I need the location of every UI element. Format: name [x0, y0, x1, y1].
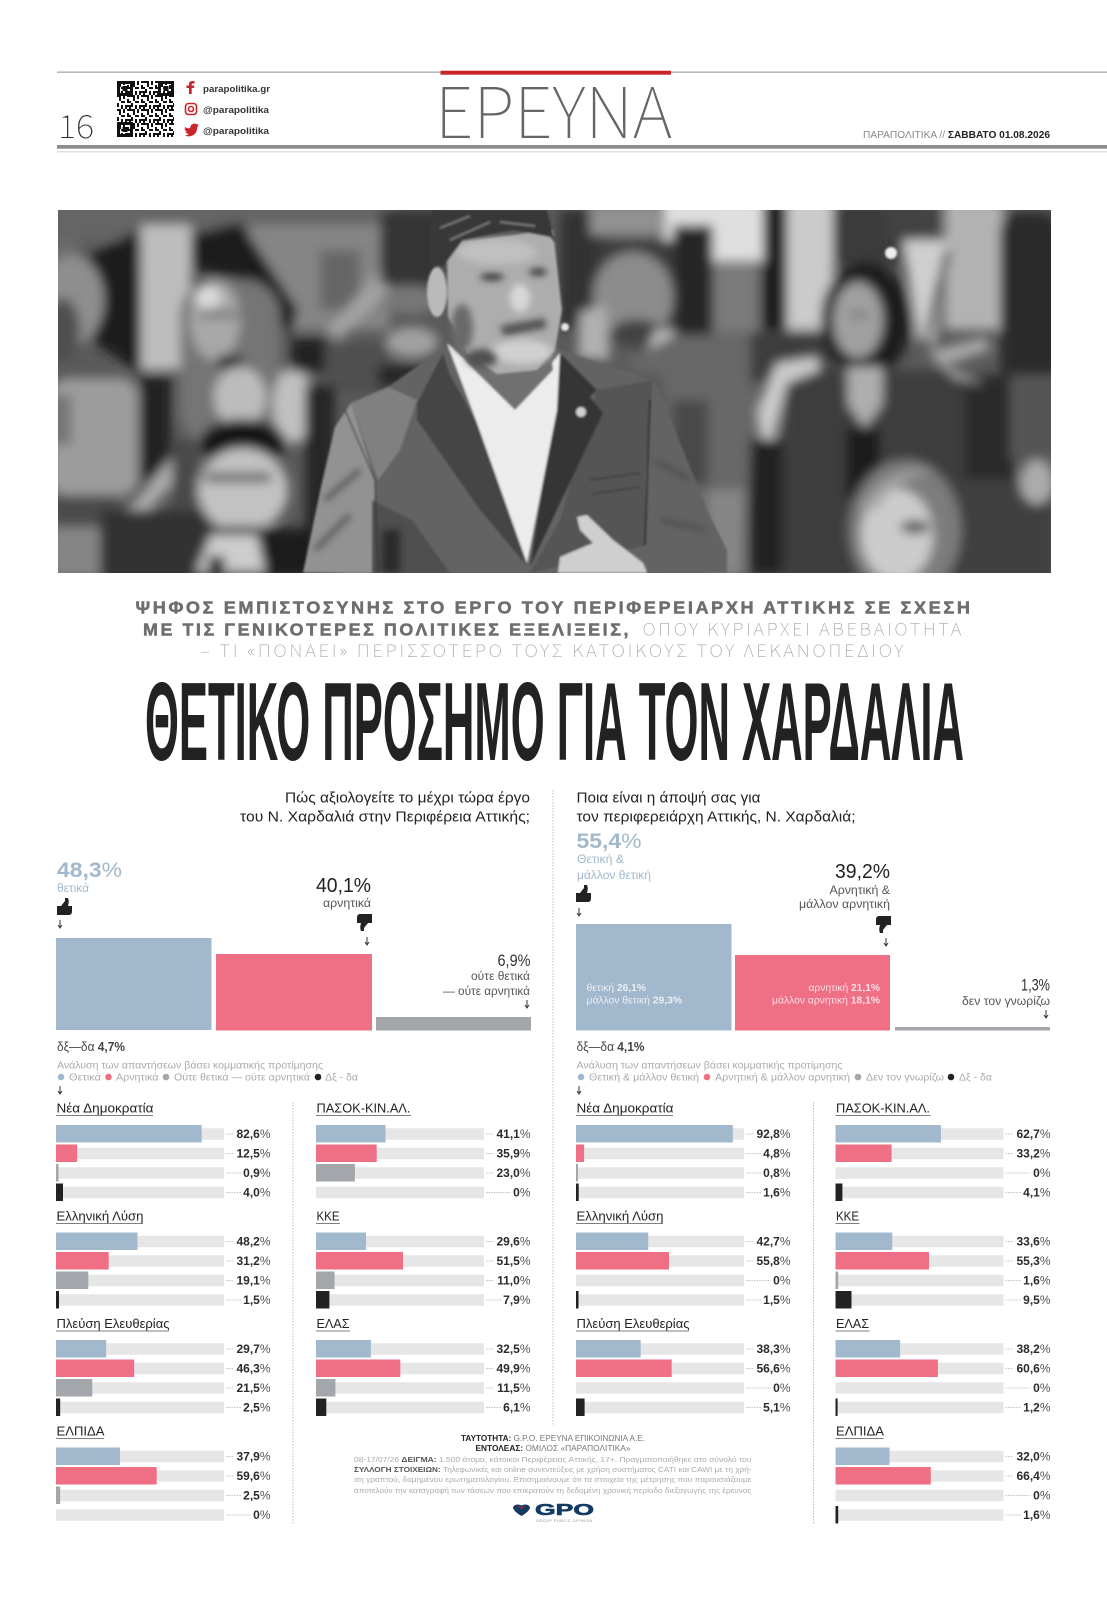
callout: positive: θετικά	[57, 883, 89, 895]
party bars: Πλεύση Ελευθερίας (right): 56,6%	[756, 1362, 791, 1376]
bar annotation: positive split	[586, 982, 682, 1006]
legend	[58, 1072, 358, 1094]
panel: left question summary	[56, 790, 531, 1094]
icon: twitter	[184, 124, 199, 136]
party bars: Πλεύση Ελευθερίας (right): Πλεύση Ελευθερίας	[576, 1317, 690, 1331]
callout: neither	[443, 951, 530, 1008]
woman with long hair	[180, 280, 280, 445]
party bars: Πλεύση Ελευθερίας (right): 0%	[773, 1381, 791, 1395]
sleeve creases	[315, 460, 705, 573]
icon: instagram	[186, 104, 196, 114]
party bars: Νέα Δημοκρατία (right): 4,8%	[763, 1146, 791, 1160]
party bars: ΠΑΣΟΚ-ΚΙΝ.ΑΛ. (left)	[316, 1102, 531, 1200]
callout: negative	[316, 875, 372, 945]
party bars: ΕΛΑΣ (right): 0%	[1033, 1381, 1051, 1395]
seated man	[258, 528, 310, 578]
party bars: Ελληνική Λύση (right): 1,5%	[763, 1293, 791, 1307]
party bars: ΚΚΕ (left)	[316, 1210, 531, 1308]
party bars: ΚΚΕ (right): 9,5%	[1023, 1293, 1051, 1307]
party bars: Ελληνική Λύση (right): 0%	[773, 1274, 791, 1288]
party bars: Πλεύση Ελευθερίας (left): 21,5%	[236, 1381, 271, 1395]
kicker: – ΤΙ «ΠΟΝΑΕΙ» ΠΕΡΙΣΣΟΤΕΡΟ ΤΟΥΣ ΚΑΤΟΙΚΟΥΣ ΤΟΥ ΛΕΚΑΝΟΠΕΔΙΟΥ	[200, 638, 906, 663]
party bars: ΕΛΠΙΔΑ (right)	[836, 1424, 1051, 1524]
social links: @parapolitika	[203, 126, 270, 137]
callout: positive: 48,3%	[57, 859, 122, 882]
party bars: ΠΑΣΟΚ-ΚΙΝ.ΑΛ. (right)	[836, 1102, 1051, 1201]
callout: negative	[799, 861, 891, 946]
party bars: ΕΛΑΣ (left): 6,1%	[503, 1400, 531, 1414]
logo: GPO: GPO	[535, 1502, 594, 1519]
section red bar	[440, 71, 671, 75]
header top rule	[57, 72, 1107, 73]
backdrop left	[50, 200, 395, 240]
party bars: Πλεύση Ελευθερίας (left)	[56, 1317, 271, 1416]
party bars: ΕΛΠΙΔΑ (left): ΕΛΠΙΔΑ	[56, 1424, 105, 1438]
social links	[184, 81, 270, 137]
party bars: ΕΛΑΣ (left): 32,5%	[496, 1342, 531, 1356]
party bars: ΠΑΣΟΚ-ΚΙΝ.ΑΛ. (right): 4,1%	[1023, 1186, 1051, 1200]
party bars: Ελληνική Λύση (left): 1,5%	[243, 1293, 271, 1307]
methodology note: ΣΥΛΛΟΓΗ ΣΤΟΙΧΕΙΩΝ: Τηλεφωνικές και online συνεντεύξεις με χρήση συστήματος CATI και CAWI με τη χρή-	[354, 1465, 752, 1474]
lapel right	[530, 353, 603, 567]
dk/na figure: δξ—δα 4,7%	[57, 1039, 125, 1054]
party bars: ΚΚΕ (right): ΚΚΕ	[836, 1210, 859, 1224]
callout: positive	[57, 859, 122, 928]
party bars: ΕΛΑΣ (left): 49,9%	[496, 1362, 531, 1376]
party bars: ΠΑΣΟΚ-ΚΙΝ.ΑΛ. (right): ΠΑΣΟΚ-ΚΙΝ.ΑΛ.	[836, 1102, 930, 1116]
sub-column divider left	[292, 1102, 294, 1524]
question: τον περιφερειάρχη Αττικής, Ν. Χαρδαλιά;	[576, 808, 856, 826]
party bars: Πλεύση Ελευθερίας (left): Πλεύση Ελευθερίας	[56, 1317, 170, 1331]
party bars: ΚΚΕ (right): 33,6%	[1016, 1234, 1051, 1248]
party bars: Ελληνική Λύση (left): 19,1%	[236, 1274, 271, 1288]
party bars: ΚΚΕ (right): 1,6%	[1023, 1274, 1051, 1288]
callout: negative: Αρνητική &	[830, 883, 890, 897]
methodology note: 08-17/07/26 ΔΕΙΓΜΑ: 1.500 άτομα, κάτοικοι Περιφέρειας Αττικής, 17+. Πραγματοποιήθηκε στο σύνολό του	[354, 1455, 752, 1464]
question: του Ν. Χαρδαλιά στην Περιφέρεια Αττικής;	[240, 808, 530, 826]
party bars: ΕΛΑΣ (right): 60,6%	[1016, 1362, 1051, 1376]
social links: parapolitika.gr	[203, 84, 270, 95]
party bars: ΚΚΕ (left): 11,0%	[497, 1274, 531, 1288]
party bars: Νέα Δημοκρατία (left)	[56, 1102, 271, 1201]
party bars: ΕΛΑΣ (right): 1,2%	[1023, 1400, 1051, 1414]
microphone	[561, 323, 569, 331]
icon: facebook	[186, 81, 194, 94]
callout: negative: 39,2%	[835, 861, 890, 883]
lapel left	[417, 353, 527, 566]
logo: GPO: GROUP PUBLIC OPINION	[536, 1519, 592, 1523]
methodology note: αποτελούν την καταγραφή των τάσεων που επικρατούν τη δεδομένη χρονική περίοδο διεξαγωγής της έρευνας	[354, 1486, 752, 1495]
party bars: ΕΛΑΣ (left)	[316, 1317, 531, 1416]
callout: positive	[576, 830, 651, 916]
legend: Ούτε θετικά — ούτε αρνητικά	[174, 1072, 310, 1084]
cheek shadow	[451, 304, 473, 352]
callout: neither: 6,9%	[498, 951, 530, 970]
kicker: ΟΠΟΥ ΚΥΡΙΑΡΧΕΙ ΑΒΕΒΑΙΟΤΗΤΑ	[642, 616, 964, 642]
party bars: Ελληνική Λύση (left): 31,2%	[236, 1254, 271, 1268]
party bars: Νέα Δημοκρατία (right): Νέα Δημοκρατία	[576, 1102, 674, 1116]
party bars: ΕΛΠΙΔΑ (left)	[56, 1424, 271, 1522]
ear	[427, 267, 447, 317]
header	[57, 58, 1107, 159]
party bars: Πλεύση Ελευθερίας (left): 29,7%	[236, 1342, 271, 1356]
party bars: ΕΛΑΣ (left): ΕΛΑΣ	[316, 1317, 350, 1331]
kicker: ΨΗΦΟΣ ΕΜΠΙΣΤΟΣΥΝΗΣ ΣΤΟ ΕΡΓΟ ΤΟΥ ΠΕΡΙΦΕΡΕΙΑΡΧΗ ΑΤΤΙΚΗΣ ΣΕ ΣΧΕΣΗ	[136, 598, 973, 618]
bar annotation: positive split: μάλλον θετική 29,3%	[586, 994, 682, 1006]
photo: speaker in suit against blurred audience	[58, 210, 1051, 573]
legend: Δξ - δα	[325, 1072, 358, 1084]
party bars: ΕΛΑΣ (right): ΕΛΑΣ	[836, 1317, 869, 1331]
party bars: ΕΛΠΙΔΑ (right): 32,0%	[1016, 1450, 1051, 1464]
bar annotation: positive split: θετική 26,1%	[586, 982, 646, 994]
lapel badge of background figure	[885, 247, 897, 259]
party bars: ΕΛΑΣ (right): 38,2%	[1016, 1342, 1051, 1356]
party bars: Νέα Δημοκρατία (right)	[576, 1102, 791, 1201]
callout: don't know: 1,3%	[1021, 976, 1050, 994]
callout: don't know	[962, 976, 1050, 1018]
neck	[463, 353, 554, 411]
bar annotation: negative split: αρνητική 21,1%	[808, 982, 880, 994]
section title: ΕΡΕΥΝΑ	[435, 58, 672, 159]
jacket	[370, 345, 646, 573]
question: Ποια είναι η άποψή σας για	[576, 790, 761, 806]
callout: positive: Θετική &	[577, 854, 624, 866]
header bottom rule	[57, 145, 1107, 149]
party bars: Πλεύση Ελευθερίας (right): 5,1%	[763, 1400, 791, 1414]
party bars: ΕΛΠΙΔΑ (right): 1,6%	[1023, 1508, 1051, 1522]
party bars: Πλεύση Ελευθερίας (left): 46,3%	[236, 1362, 271, 1376]
party bars: ΕΛΠΙΔΑ (left): 2,5%	[243, 1488, 271, 1502]
party bars: Ελληνική Λύση (right)	[576, 1210, 791, 1308]
party bars: Ελληνική Λύση (right): 55,8%	[756, 1254, 791, 1268]
party bars: Νέα Δημοκρατία (right): 0,8%	[763, 1166, 791, 1180]
party bars: Νέα Δημοκρατία (left): 12,5%	[236, 1146, 271, 1160]
callout: negative: μάλλον αρνητική	[799, 897, 890, 911]
party bars: Ελληνική Λύση (right): 42,7%	[756, 1234, 791, 1248]
legend: Θετικά	[69, 1072, 101, 1084]
column divider	[552, 790, 554, 1425]
callout: neither: ούτε θετικά	[471, 969, 530, 983]
breakdown note: Ανάλυση των απαντήσεων βάσει κομματικής προτίμησης	[576, 1060, 843, 1072]
party bars: ΕΛΠΙΔΑ (left): 37,9%	[236, 1450, 271, 1464]
party bars: ΕΛΑΣ (left): 11,5%	[497, 1381, 531, 1395]
party bars: Νέα Δημοκρατία (right): 1,6%	[763, 1186, 791, 1200]
panel: right question summary	[576, 790, 1050, 1094]
lapel pin	[576, 407, 586, 417]
party bars: Νέα Δημοκρατία (left): 0,9%	[243, 1166, 271, 1180]
hair	[430, 210, 555, 267]
bar chart: overall	[56, 938, 531, 1030]
pocket	[590, 473, 640, 494]
question	[240, 790, 530, 826]
kicker	[136, 598, 973, 663]
party bars: ΕΛΠΙΔΑ (right): 66,4%	[1016, 1469, 1051, 1483]
arm	[123, 451, 181, 520]
party bars: ΚΚΕ (right)	[836, 1210, 1051, 1308]
party bars: ΠΑΣΟΚ-ΚΙΝ.ΑΛ. (right): 0%	[1033, 1166, 1051, 1180]
right background	[763, 200, 787, 330]
party bars: Πλεύση Ελευθερίας (right)	[576, 1317, 791, 1416]
shirt	[447, 343, 560, 563]
hand	[558, 515, 647, 573]
party bars: ΚΚΕ (left): 29,6%	[496, 1234, 531, 1248]
nose	[510, 284, 530, 312]
callout: negative: 40,1%	[316, 875, 371, 897]
bar annotation: negative split	[772, 982, 880, 1006]
legend	[577, 1072, 992, 1094]
social links: @parapolitika	[203, 105, 270, 116]
dark suit back row	[88, 229, 142, 376]
party bars: Ελληνική Λύση (left): 48,2%	[236, 1234, 271, 1248]
dk/na figure: δξ—δα 4,1%	[576, 1039, 645, 1054]
party bars: ΚΚΕ (left): 51,5%	[496, 1254, 531, 1268]
sub-column divider right	[812, 1102, 814, 1524]
icon: qr code	[117, 81, 174, 137]
callout: positive: μάλλον θετική	[577, 870, 651, 882]
page number: 16	[58, 102, 94, 148]
party bars: ΠΑΣΟΚ-ΚΙΝ.ΑΛ. (left): 41,1%	[496, 1127, 531, 1141]
legend: Δεν τον γνωρίζω	[866, 1072, 944, 1084]
kicker: ΜΕ ΤΙΣ ΓΕΝΙΚΟΤΕΡΕΣ ΠΟΛΙΤΙΚΕΣ ΕΞΕΛΙΞΕΙΣ,	[143, 620, 631, 640]
callout: neither: — ούτε αρνητικά	[443, 984, 530, 998]
sleeve left highlight	[303, 403, 375, 573]
party bars: Νέα Δημοκρατία (right): 92,8%	[756, 1127, 791, 1141]
body right	[530, 380, 653, 573]
callout: don't know: δεν τον γνωρίζω	[962, 994, 1050, 1008]
face	[447, 230, 562, 374]
party bars: ΠΑΣΟΚ-ΚΙΝ.ΑΛ. (left): 0%	[513, 1186, 531, 1200]
party bars: ΕΛΠΙΔΑ (left): 59,6%	[236, 1469, 271, 1483]
forehead light	[457, 240, 537, 264]
left of head background	[380, 210, 440, 285]
party bars: ΚΚΕ (left): ΚΚΕ	[316, 1210, 340, 1224]
party bars: ΠΑΣΟΚ-ΚΙΝ.ΑΛ. (left): 23,0%	[496, 1166, 531, 1180]
logo: GPO	[513, 1502, 594, 1523]
party bars: Νέα Δημοκρατία (left): 4,0%	[243, 1186, 271, 1200]
legend: Δξ - δα	[959, 1072, 992, 1084]
party bars: ΠΑΣΟΚ-ΚΙΝ.ΑΛ. (right): 62,7%	[1016, 1127, 1051, 1141]
woman dark hair right	[783, 370, 967, 580]
legend: Θετική & μάλλον θετική	[589, 1072, 699, 1084]
party bars: ΕΛΠΙΔΑ (left): 0%	[253, 1508, 271, 1522]
bar annotation: negative split: μάλλον αρνητική 18,1%	[772, 994, 880, 1006]
party bars: Ελληνική Λύση (right): Ελληνική Λύση	[576, 1210, 664, 1224]
party bars: Πλεύση Ελευθερίας (left): 2,5%	[243, 1400, 271, 1414]
party bars: Ελληνική Λύση (left)	[56, 1210, 271, 1308]
question	[576, 790, 856, 826]
party bars: ΠΑΣΟΚ-ΚΙΝ.ΑΛ. (left): ΠΑΣΟΚ-ΚΙΝ.ΑΛ.	[316, 1102, 411, 1116]
speaker	[303, 210, 727, 573]
party bars: ΚΚΕ (right): 55,3%	[1016, 1254, 1051, 1268]
breakdown note: Ανάλυση των απαντήσεων βάσει κομματικής προτίμησης	[57, 1060, 323, 1072]
left figure	[40, 255, 104, 345]
bar chart: overall	[576, 924, 1050, 1030]
methodology note: ΕΝΤΟΛΕΑΣ: ΟΜΙΛΟΣ «ΠΑΡΑΠΟΛΙΤΙΚΑ»	[476, 1443, 631, 1453]
party bars: Ελληνική Λύση (left): Ελληνική Λύση	[56, 1210, 144, 1224]
methodology note: ση γραπτού, δομημένου ερωτηματολογίου. Επισημαίνουμε ότι τα στοιχεία της μέτρησης που παρουσιάζουμε	[354, 1475, 752, 1484]
party bars: ΠΑΣΟΚ-ΚΙΝ.ΑΛ. (right): 33,2%	[1016, 1146, 1051, 1160]
issue date: ΠΑΡΑΠΟΛΙΤΙΚΑ // ΣΑΒΒΑΤΟ 01.08.2026	[863, 129, 1050, 141]
party bars: Πλεύση Ελευθερίας (right): 38,3%	[756, 1342, 791, 1356]
legend: Αρνητική & μάλλον αρνητική	[715, 1072, 850, 1084]
party bars: ΠΑΣΟΚ-ΚΙΝ.ΑΛ. (left): 35,9%	[496, 1146, 531, 1160]
question: Πώς αξιολογείτε το μέχρι τώρα έργο	[285, 790, 530, 806]
party bars: ΕΛΠΙΔΑ (right): ΕΛΠΙΔΑ	[836, 1424, 885, 1438]
callout: positive: 55,4%	[576, 830, 642, 853]
party bars: Νέα Δημοκρατία (left): Νέα Δημοκρατία	[56, 1102, 154, 1116]
moustache and mouth	[500, 318, 546, 336]
beard	[492, 340, 552, 364]
party bars: Νέα Δημοκρατία (left): 82,6%	[236, 1127, 271, 1141]
blonde woman	[849, 460, 961, 600]
methodology note	[354, 1433, 752, 1495]
behind man right	[560, 210, 605, 330]
hands	[757, 357, 820, 440]
party bars: ΚΚΕ (left): 7,9%	[503, 1293, 531, 1307]
party bars: ΕΛΑΣ (right)	[836, 1317, 1051, 1416]
eyes	[480, 274, 504, 280]
party bars: ΕΛΠΙΔΑ (right): 0%	[1033, 1488, 1051, 1502]
callout: negative: αρνητικά	[323, 896, 371, 910]
blurred audience	[58, 210, 1051, 573]
legend: Αρνητικά	[116, 1072, 159, 1084]
methodology note: ΤΑΥΤΟΤΗΤΑ: G.P.O. ΕΡΕΥΝΑ ΕΠΙΚΟΙΝΩΝΙΑ Α.Ε.	[461, 1433, 645, 1443]
